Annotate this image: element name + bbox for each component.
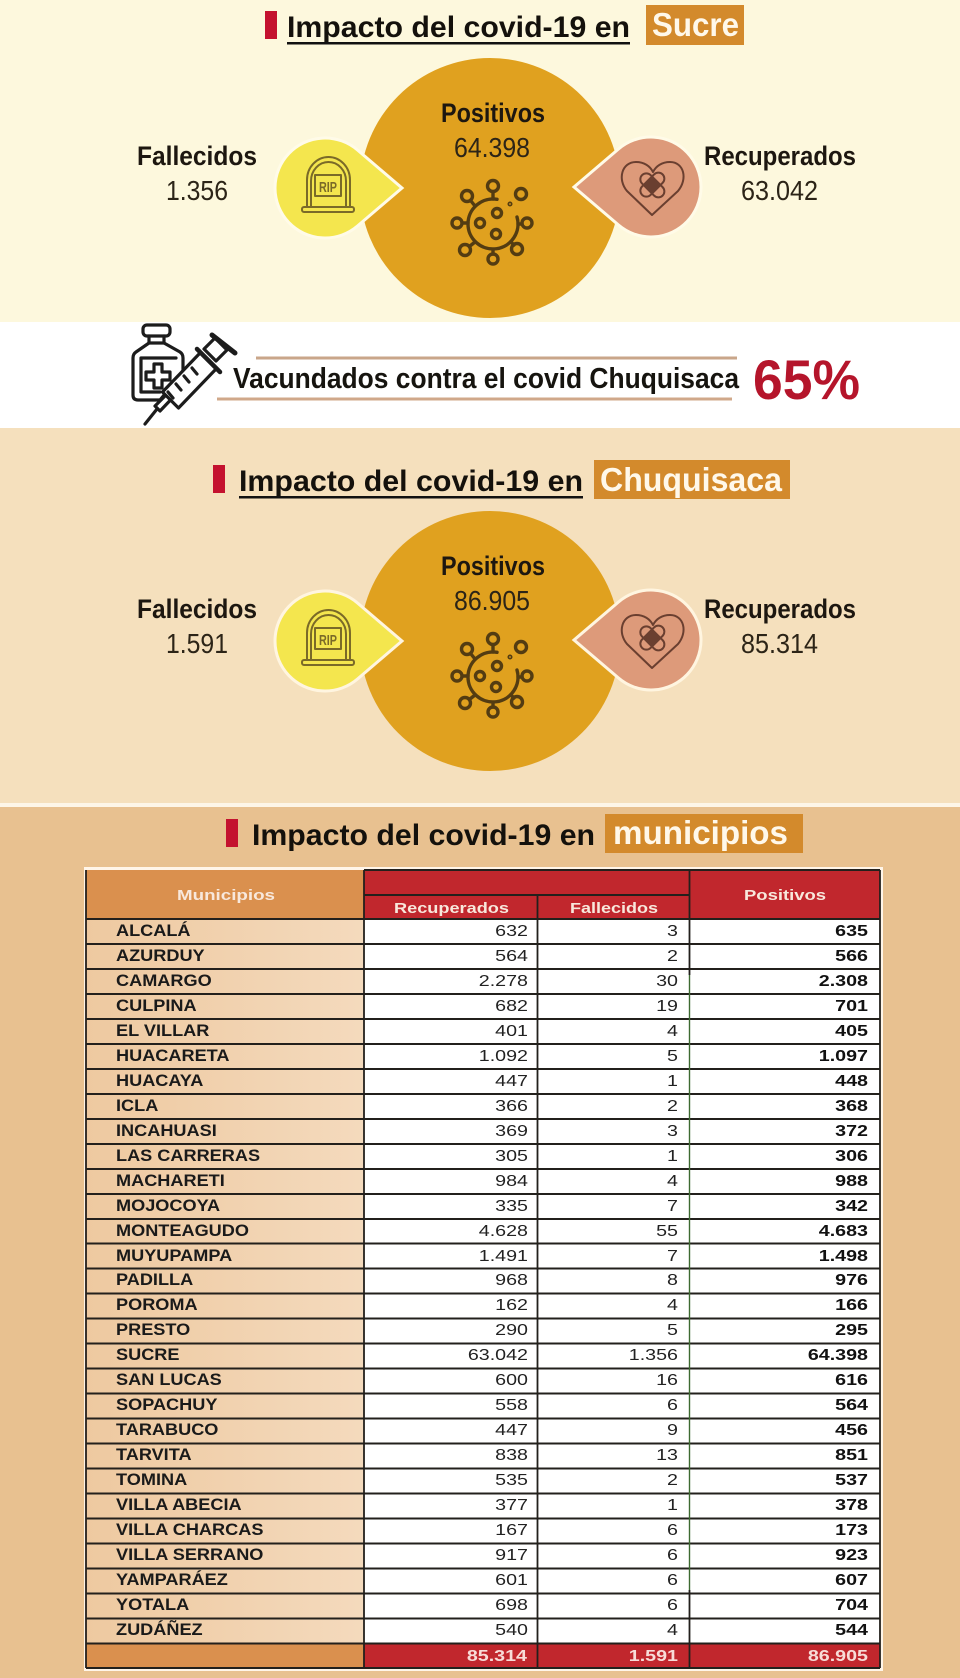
row: Padilla: 8 — [667, 1271, 678, 1289]
icon: tombstone: RIP — [319, 179, 337, 196]
circle: positivos Chuquisaca: Positivos — [441, 551, 545, 581]
row: Zudáñez: ZUDÁÑEZ — [116, 1620, 203, 1639]
row: Alcalá: 635 — [835, 922, 868, 940]
table header: Positivos — [744, 887, 826, 904]
panel: impacto en Chuquisaca — [0, 428, 960, 803]
circle: positivos Sucre: 64.398 — [454, 132, 530, 163]
row: Zudáñez: 540 — [495, 1621, 528, 1639]
row: Villa Serrano: VILLA SERRANO — [116, 1545, 263, 1564]
heading: Chuquisaca: Chuquisaca — [600, 461, 783, 498]
row: Machareti — [116, 1171, 868, 1190]
row: Icla: 366 — [495, 1097, 528, 1115]
row: Tarvita: 838 — [495, 1446, 528, 1464]
row: Zudáñez: 544 — [835, 1621, 868, 1639]
row: Presto: 5 — [667, 1321, 678, 1339]
row: Las Carreras: 306 — [835, 1147, 868, 1165]
row: Sopachuy: 564 — [835, 1396, 868, 1414]
row: Icla: 368 — [835, 1097, 868, 1115]
row: Tomina: TOMINA — [116, 1470, 188, 1489]
label: fallecidos Sucre: Fallecidos — [137, 141, 257, 171]
row: Huacaya: 447 — [495, 1072, 528, 1090]
row: Incahuasi: 369 — [495, 1122, 528, 1140]
circle: positivos Chuquisaca: 86.905 — [454, 585, 530, 616]
row: Camargo: CAMARGO — [116, 971, 212, 990]
row: Zudáñez — [116, 1620, 868, 1639]
row: El Villar — [116, 1021, 868, 1040]
row: Villa Serrano — [116, 1545, 868, 1564]
row: Presto: PRESTO — [116, 1320, 190, 1339]
figure: 65%: 65% — [753, 348, 860, 411]
row: Huacareta: 1.092 — [479, 1047, 528, 1065]
row: Monteagudo: 55 — [656, 1222, 678, 1240]
row: Mojocoya: 342 — [835, 1197, 868, 1215]
row: Camargo — [116, 971, 868, 990]
icon: heart with bandage — [622, 162, 684, 215]
row: Presto: 295 — [835, 1321, 868, 1339]
row: Tarabuco — [116, 1420, 868, 1439]
row: Huacaya — [116, 1071, 868, 1090]
panel: vacunados — [0, 322, 960, 428]
row: totals: 85.314 — [467, 1647, 527, 1665]
row: Yamparáez: 607 — [835, 1571, 868, 1589]
row: Machareti: 984 — [495, 1172, 528, 1190]
row: Icla: ICLA — [116, 1096, 159, 1115]
row: Padilla: 976 — [835, 1271, 868, 1289]
row: Huacareta — [116, 1046, 868, 1065]
label: fallecidos Chuquisaca — [137, 594, 257, 659]
row: Villa Charcas — [116, 1520, 868, 1539]
row: San Lucas — [116, 1370, 868, 1389]
row: Sopachuy: SOPACHUY — [116, 1395, 218, 1414]
row: Incahuasi: 372 — [835, 1122, 868, 1140]
heading: municipios: Impacto del covid-19 en — [252, 819, 595, 852]
row: Tarabuco: 9 — [667, 1421, 678, 1439]
row: Tarabuco: 456 — [835, 1421, 868, 1439]
row: Muyupampa — [116, 1246, 868, 1265]
circle: positivos Sucre — [360, 58, 620, 318]
row: Sopachuy: 6 — [667, 1396, 678, 1414]
row: Muyupampa: 1.491 — [479, 1247, 528, 1265]
row: Poroma: POROMA — [116, 1295, 198, 1314]
text: vacunados: Vacundados contra el covid Chuquisaca — [233, 363, 740, 395]
row: Huacaya: 448 — [835, 1072, 868, 1090]
row: Tarvita — [116, 1445, 868, 1464]
row: Azurduy: 564 — [495, 947, 528, 965]
row: Machareti: 988 — [835, 1172, 868, 1190]
row: Monteagudo: 4.628 — [479, 1222, 528, 1240]
heading: Sucre — [265, 5, 744, 45]
label: fallecidos Chuquisaca: 1.591 — [166, 628, 228, 659]
drop: recuperados Sucre — [574, 137, 701, 237]
row: Poroma: 166 — [835, 1296, 868, 1314]
drop: fallecidos Sucre — [275, 138, 402, 238]
row: Tarabuco: TARABUCO — [116, 1420, 218, 1439]
row: totals — [467, 1647, 868, 1665]
drop: recuperados Chuquisaca — [574, 590, 701, 690]
row: Sucre: 63.042 — [468, 1346, 528, 1364]
row: Villa Charcas: VILLA CHARCAS — [116, 1520, 263, 1539]
row: Huacaya: 1 — [667, 1072, 678, 1090]
row: Sopachuy — [116, 1395, 868, 1414]
row: Culpina: 682 — [495, 997, 528, 1015]
row: Villa Serrano: 923 — [835, 1546, 868, 1564]
row: Las Carreras: 1 — [667, 1147, 678, 1165]
row: Sopachuy: 558 — [495, 1396, 528, 1414]
row: Villa Abecia: 377 — [495, 1496, 528, 1514]
divider lines — [217, 356, 737, 400]
row: Huacareta: HUACARETA — [116, 1046, 230, 1065]
heading: municipios: municipios — [613, 814, 788, 851]
row: El Villar: 4 — [667, 1022, 678, 1040]
row: Tarvita: 851 — [835, 1446, 868, 1464]
row: El Villar: 401 — [495, 1022, 528, 1040]
row: Azurduy: 2 — [667, 947, 678, 965]
row: Muyupampa: MUYUPAMPA — [116, 1246, 233, 1265]
row: Alcalá — [116, 921, 868, 940]
row: Camargo: 2.308 — [819, 972, 868, 990]
row: Yamparáez: 6 — [667, 1571, 678, 1589]
row: Villa Serrano: 917 — [495, 1546, 528, 1564]
row: Incahuasi: INCAHUASI — [116, 1121, 217, 1140]
row: Yamparáez: YAMPARÁEZ — [116, 1570, 228, 1589]
row: San Lucas: 600 — [495, 1371, 528, 1389]
label: recuperados Chuquisaca: 85.314 — [741, 628, 818, 659]
row: Padilla — [116, 1270, 868, 1289]
row: Huacareta: 5 — [667, 1047, 678, 1065]
row: Yotala: 704 — [835, 1596, 868, 1614]
label: recuperados Sucre: Recuperados — [704, 141, 856, 171]
row: Villa Abecia: VILLA ABECIA — [116, 1495, 242, 1514]
row: Poroma: 162 — [495, 1296, 528, 1314]
table header — [177, 887, 826, 917]
row: Villa Charcas: 167 — [495, 1521, 528, 1539]
row: Monteagudo — [116, 1221, 868, 1240]
row: Yotala: 698 — [495, 1596, 528, 1614]
table: municipios — [84, 867, 883, 1671]
circle: positivos Sucre: Positivos — [441, 98, 545, 128]
row: Tomina — [116, 1470, 868, 1489]
heading: Sucre: Impacto del covid-19 en — [287, 11, 630, 44]
row: El Villar: EL VILLAR — [116, 1021, 210, 1040]
row: San Lucas: SAN LUCAS — [116, 1370, 222, 1389]
icon: tombstone — [302, 610, 354, 665]
icon: tombstone: RIP — [319, 632, 337, 649]
row: Las Carreras: LAS CARRERAS — [116, 1146, 260, 1165]
row: Villa Serrano: 6 — [667, 1546, 678, 1564]
row: Poroma: 4 — [667, 1296, 678, 1314]
row: Alcalá: ALCALÁ — [116, 921, 191, 940]
drop: fallecidos Chuquisaca — [275, 591, 402, 691]
row: Huacareta: 1.097 — [819, 1047, 868, 1065]
row: Villa Charcas: 173 — [835, 1521, 868, 1539]
row: Poroma — [116, 1295, 868, 1314]
row: Icla — [116, 1096, 868, 1115]
row: Yotala — [116, 1595, 868, 1614]
label: recuperados Sucre — [704, 141, 856, 206]
row: Sucre: SUCRE — [116, 1345, 179, 1364]
row: Mojocoya: 7 — [667, 1197, 678, 1215]
row: Camargo: 2.278 — [479, 972, 528, 990]
row: Las Carreras: 305 — [495, 1147, 528, 1165]
icon: vial and syringe — [133, 325, 235, 424]
row: Tomina: 2 — [667, 1471, 678, 1489]
circle: positivos Chuquisaca — [360, 511, 620, 771]
row: Yotala: YOTALA — [116, 1595, 190, 1614]
row: Incahuasi — [116, 1121, 868, 1140]
row: Alcalá: 3 — [667, 922, 678, 940]
table header: Municipios — [177, 887, 275, 904]
row: totals: 1.591 — [629, 1647, 678, 1665]
row: Alcalá: 632 — [495, 922, 528, 940]
row: San Lucas: 616 — [835, 1371, 868, 1389]
row: Yotala: 6 — [667, 1596, 678, 1614]
row: Tarvita: TARVITA — [116, 1445, 192, 1464]
row: Muyupampa: 1.498 — [819, 1247, 868, 1265]
row: Villa Abecia — [116, 1495, 868, 1514]
table header: Fallecidos — [570, 900, 658, 917]
label: fallecidos Chuquisaca: Fallecidos — [137, 594, 257, 624]
label: fallecidos Sucre: 1.356 — [166, 175, 228, 206]
label: recuperados Sucre: 63.042 — [741, 175, 818, 206]
heading: Chuquisaca: Impacto del covid-19 en — [239, 465, 583, 498]
label: recuperados Chuquisaca — [704, 594, 856, 659]
row: Mojocoya: MOJOCOYA — [116, 1196, 221, 1215]
row: Tarabuco: 447 — [495, 1421, 528, 1439]
heading: Sucre: Sucre — [652, 6, 739, 43]
row: Azurduy: 566 — [835, 947, 868, 965]
icon: virus — [452, 180, 532, 264]
row: Muyupampa: 7 — [667, 1247, 678, 1265]
row: totals: 86.905 — [808, 1647, 868, 1665]
panel: impacto en municipios — [0, 803, 960, 1678]
row: Machareti: 4 — [667, 1172, 678, 1190]
row: Tomina: 537 — [835, 1471, 868, 1489]
row: Padilla: 968 — [495, 1271, 528, 1289]
row: Zudáñez: 4 — [667, 1621, 678, 1639]
row: Mojocoya — [116, 1196, 868, 1215]
label: fallecidos Sucre — [137, 141, 257, 206]
icon: heart with bandage — [622, 615, 684, 668]
row: Presto — [116, 1320, 868, 1339]
label: recuperados Chuquisaca: Recuperados — [704, 594, 856, 624]
row: Monteagudo: MONTEAGUDO — [116, 1221, 249, 1240]
row: Huacaya: HUACAYA — [116, 1071, 204, 1090]
row: Sucre: 1.356 — [629, 1346, 678, 1364]
heading: Chuquisaca — [213, 460, 790, 499]
row: Tomina: 535 — [495, 1471, 528, 1489]
row: Sucre: 64.398 — [808, 1346, 868, 1364]
row: Culpina: 19 — [656, 997, 678, 1015]
row: Azurduy: AZURDUY — [116, 946, 205, 965]
row: Sucre — [116, 1345, 868, 1364]
heading: municipios — [226, 814, 803, 853]
row: Presto: 290 — [495, 1321, 528, 1339]
row: Culpina — [116, 996, 868, 1015]
row: Padilla: PADILLA — [116, 1270, 194, 1289]
row: Culpina: CULPINA — [116, 996, 197, 1015]
row: Yamparáez: 601 — [495, 1571, 528, 1589]
row: El Villar: 405 — [835, 1022, 868, 1040]
row: Mojocoya: 335 — [495, 1197, 528, 1215]
row: Las Carreras — [116, 1146, 868, 1165]
panel: impacto en Sucre — [0, 0, 960, 322]
icon: tombstone — [302, 157, 354, 212]
row: Villa Abecia: 378 — [835, 1496, 868, 1514]
row: Incahuasi: 3 — [667, 1122, 678, 1140]
row: Villa Charcas: 6 — [667, 1521, 678, 1539]
row: San Lucas: 16 — [656, 1371, 678, 1389]
row: Azurduy — [116, 946, 868, 965]
icon: virus — [452, 634, 532, 717]
row: Villa Abecia: 1 — [667, 1496, 678, 1514]
row: Culpina: 701 — [835, 997, 868, 1015]
row: Machareti: MACHARETI — [116, 1171, 225, 1190]
row: Camargo: 30 — [656, 972, 678, 990]
row: Monteagudo: 4.683 — [819, 1222, 868, 1240]
row: Yamparáez — [116, 1570, 868, 1589]
row: Tarvita: 13 — [656, 1446, 678, 1464]
table header: Recuperados — [394, 900, 509, 917]
row: Icla: 2 — [667, 1097, 678, 1115]
